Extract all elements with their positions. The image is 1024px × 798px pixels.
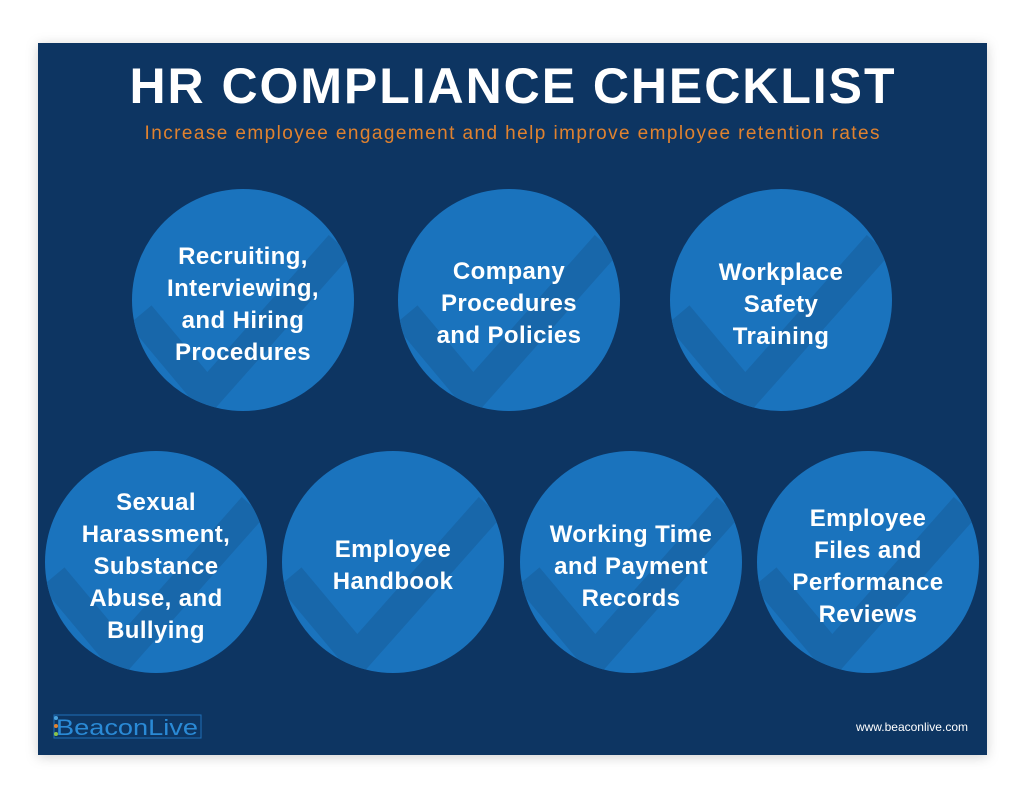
- circle: recruiting: Procedures: [175, 339, 311, 366]
- circle: working time: Records: [582, 585, 680, 612]
- circle: harassment: Substance: [94, 553, 218, 580]
- circle: harassment: Bullying: [107, 617, 205, 644]
- circle: workplace safety: Workplace: [719, 259, 843, 286]
- circle: working time: Working Time: [550, 521, 712, 548]
- subtitle: Increase employee engagement and help improve employee retention rates: [144, 123, 880, 144]
- circle: employee files: Files and: [814, 537, 922, 564]
- circle: working time: and Payment: [554, 553, 708, 580]
- circle: harassment: Sexual: [116, 489, 196, 516]
- circle: employee files: Performance: [792, 569, 944, 596]
- circle: company procedures: [398, 189, 620, 411]
- circle: employee files: Employee: [810, 505, 926, 532]
- circle: employee files: [757, 451, 979, 673]
- circle: company procedures: Procedures: [441, 290, 577, 317]
- website: www.beaconlive.com: [855, 720, 968, 734]
- circle: workplace safety: Safety: [744, 291, 818, 318]
- title: HR COMPLIANCE CHECKLIST: [130, 58, 894, 114]
- circle: harassment: [45, 451, 267, 673]
- circle: workplace safety: [670, 189, 892, 411]
- circle: workplace safety: Training: [733, 323, 829, 350]
- circle: company procedures: Company: [453, 258, 565, 285]
- circle: handbook: [282, 451, 504, 673]
- circle: recruiting: and Hiring: [182, 307, 304, 334]
- circle: company procedures: and Policies: [437, 322, 581, 349]
- circle: handbook: Employee: [335, 536, 451, 563]
- logo: BeaconLive: [56, 715, 198, 740]
- circle: recruiting: [132, 189, 354, 411]
- circle: working time: [520, 451, 742, 673]
- circle: harassment: Harassment,: [82, 521, 230, 548]
- circle: recruiting: Interviewing,: [167, 275, 319, 302]
- circle: handbook: Handbook: [333, 568, 454, 595]
- circle: employee files: Reviews: [819, 601, 917, 628]
- circle: recruiting: Recruiting,: [178, 243, 308, 270]
- circle: harassment: Abuse, and: [89, 585, 223, 612]
